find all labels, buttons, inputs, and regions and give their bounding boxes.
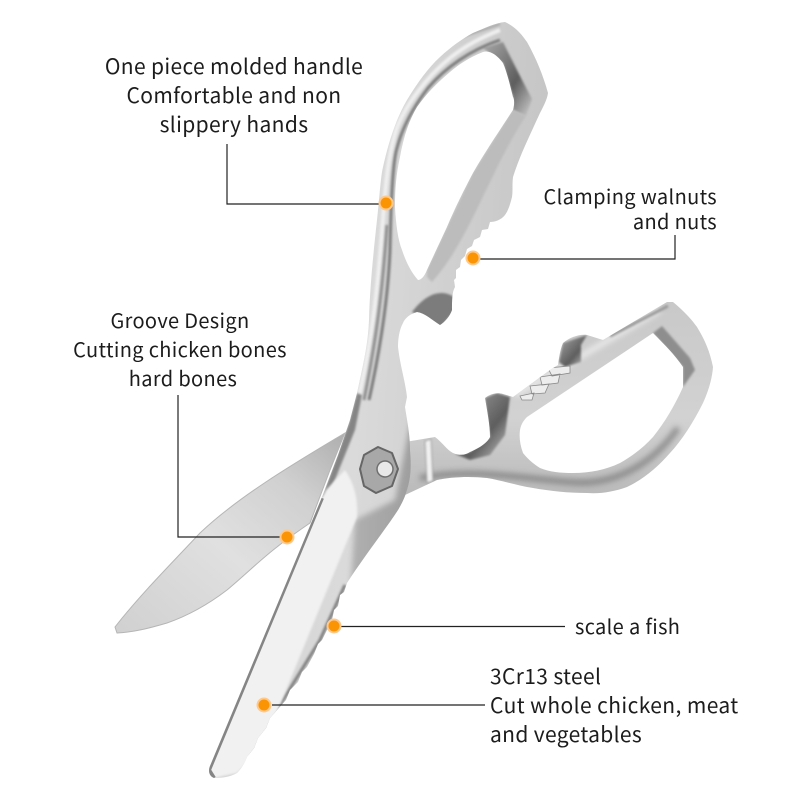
callout: clamping nuts: Clamping walnuts: [544, 181, 717, 210]
callout: groove design: Cutting chicken bones: [73, 334, 287, 363]
callout: molded handle: [105, 51, 394, 210]
callout: groove design: hard bones: [129, 363, 237, 392]
right handle: [400, 295, 720, 500]
heading text: Comfortable and non: [127, 80, 341, 110]
callout: scale a fish: [326, 611, 680, 640]
callout: groove design: Groove Design: [110, 305, 250, 334]
callout: steel: and vegetables: [490, 719, 642, 749]
scissors illustration: [115, 15, 720, 790]
callout: groove design: [73, 305, 294, 544]
callout: clamping nuts: [466, 181, 717, 266]
callout: steel: 3Cr13 steel: [490, 661, 601, 691]
heading text: slippery hands: [160, 109, 308, 139]
main arm and long blade: [200, 15, 560, 790]
callout: scale a fish: scale a fish: [575, 611, 680, 640]
pivot bolt: [360, 447, 398, 493]
heading text: One piece molded handle: [105, 51, 363, 81]
callout: steel: [256, 661, 739, 749]
lower-left blade: [115, 433, 345, 633]
callout: clamping nuts: and nuts: [633, 206, 717, 235]
callout: steel: Cut whole chicken, meat: [490, 690, 739, 720]
